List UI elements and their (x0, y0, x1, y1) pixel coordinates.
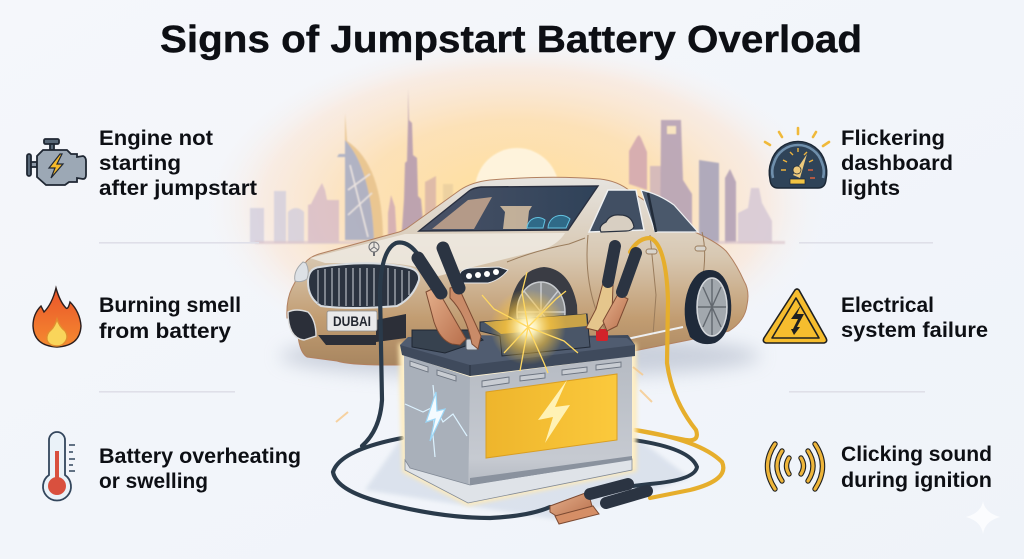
stray embers (336, 367, 652, 422)
front face (468, 356, 632, 503)
left face (404, 355, 470, 503)
text: Electrical (841, 294, 934, 317)
clamp jaws (426, 287, 466, 345)
symptom: battery overheating (43, 432, 301, 500)
dashboard gauges (500, 206, 570, 229)
icon: engine (27, 139, 86, 185)
vents (410, 361, 621, 387)
icon: warning triangle (763, 289, 827, 343)
left column dividers (99, 242, 259, 393)
icon: corner sparkle (966, 501, 1000, 534)
clamp jaws (550, 492, 592, 519)
hood highlight (310, 233, 565, 277)
spark bolts (482, 272, 578, 373)
clamp handles (590, 484, 647, 503)
symptom: electrical system failure (763, 289, 988, 343)
star emblem (369, 242, 379, 256)
sill (613, 327, 683, 342)
icon: thermometer (43, 432, 75, 500)
symptom: engine not starting (27, 127, 257, 200)
text: Battery overheating (99, 445, 301, 468)
sun (475, 148, 559, 232)
battery (400, 314, 635, 504)
battery glow outline (400, 345, 635, 504)
licence plate (327, 311, 377, 331)
text: during ignition (841, 469, 992, 492)
sparks on car and battery (336, 272, 652, 422)
Burj Al Arab (337, 113, 383, 240)
windshield (419, 186, 598, 231)
windshield reflection (432, 197, 492, 229)
base skirt (405, 456, 632, 503)
text: or swelling (99, 470, 208, 493)
text: Burning smell (99, 294, 241, 317)
text (841, 443, 992, 492)
door lines and handles (507, 232, 706, 336)
lower bumper (288, 310, 406, 345)
text (841, 127, 953, 200)
car (287, 177, 748, 365)
icon: gauge (765, 128, 829, 188)
text: Clicking sound (841, 443, 992, 466)
right towers (629, 120, 772, 243)
text: lights (841, 177, 900, 200)
black cable (333, 243, 550, 518)
sunset glow (200, 35, 830, 375)
text (841, 294, 988, 342)
title: Signs of Jumpstart Battery Overload (160, 19, 862, 61)
left black clamps (418, 248, 481, 349)
Burj Khalifa (401, 88, 425, 243)
rear wheel (685, 270, 731, 344)
text: after jumpstart (99, 177, 257, 200)
licence plate: DUBAI (333, 314, 371, 329)
ground shadow (280, 334, 760, 520)
spark glow (490, 289, 566, 365)
symptom: clicking sound (768, 443, 992, 492)
icon: sound waves (768, 444, 822, 489)
tyres (316, 271, 568, 361)
yellow cable (630, 238, 723, 498)
terminals (466, 329, 608, 350)
text: from battery (99, 320, 231, 343)
battery lid (400, 314, 635, 376)
right yellow clamps (586, 246, 636, 331)
mid towers (388, 176, 453, 243)
grille (308, 263, 419, 308)
clamp handles (418, 248, 459, 293)
horizon (255, 241, 785, 244)
clamp handles (608, 246, 636, 292)
wheel arch (508, 267, 578, 330)
text: system failure (841, 319, 988, 342)
text: dashboard (841, 152, 953, 175)
icon: flame (33, 288, 81, 347)
symptom: burning smell (33, 288, 241, 347)
text (99, 445, 301, 493)
mirror (600, 215, 634, 232)
headlights (295, 262, 508, 283)
blue electric arcs (405, 385, 467, 457)
skyline of Dubai (250, 88, 785, 244)
yellow panel (486, 374, 617, 458)
right black loop cable (633, 440, 697, 486)
front wheel (517, 282, 565, 342)
left background towers (250, 183, 339, 243)
car body (287, 177, 748, 365)
text (99, 294, 241, 343)
text: Engine not (99, 127, 213, 150)
text (99, 127, 257, 200)
text: Flickering (841, 127, 945, 150)
bottom clamp (550, 484, 647, 524)
text: starting (99, 152, 181, 175)
clamp jaws (586, 283, 613, 331)
right column dividers (789, 242, 933, 393)
side windows (589, 190, 698, 232)
symptom: flickering dashboard (765, 127, 953, 200)
